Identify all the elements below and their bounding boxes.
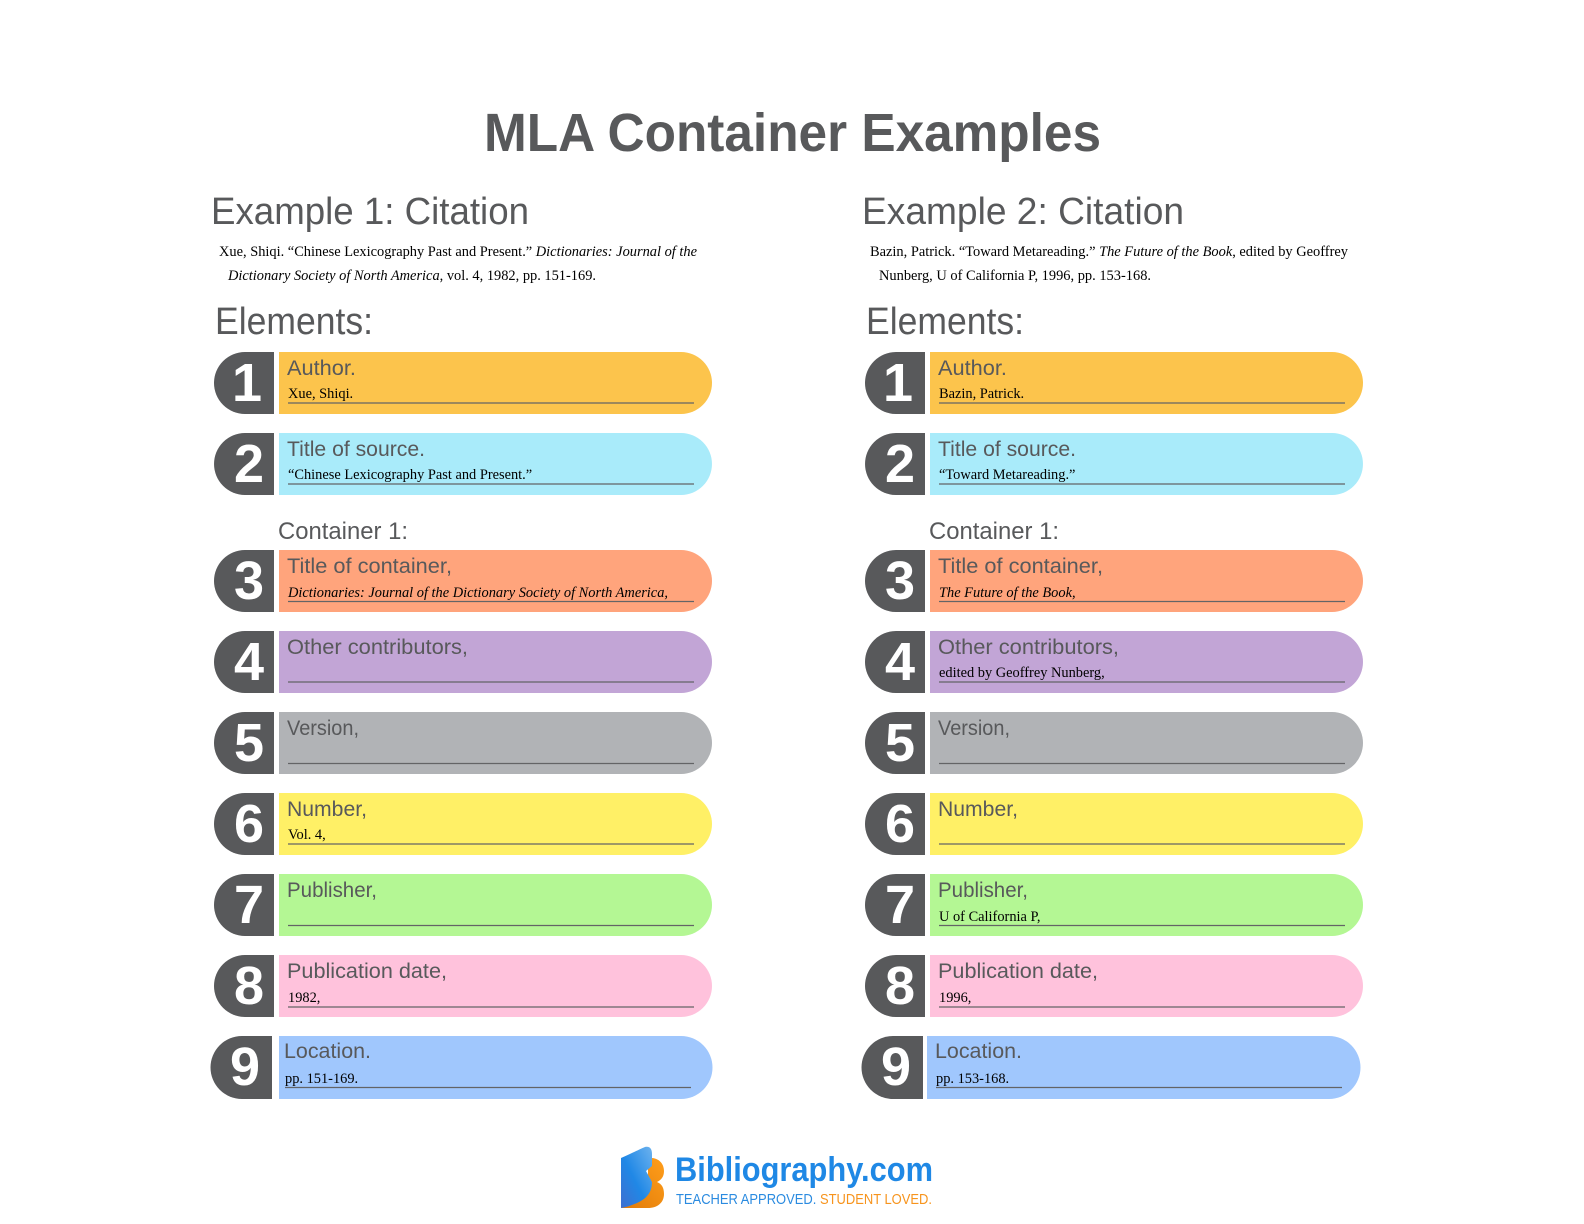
- row 8 publication date: Publication date,: [287, 960, 447, 983]
- heading: example 2 citation: Example 2: Citation: [862, 191, 1184, 233]
- row 3 title of container: Title of container,: [287, 555, 452, 578]
- container 1 label: Container 1:: [929, 518, 1059, 545]
- row 5 version: Version,: [287, 717, 359, 740]
- row 8 publication date: 8: [885, 956, 915, 1016]
- row 3 title of container: [865, 550, 1363, 612]
- row 4 other contributors: 4: [234, 632, 264, 692]
- row 3 title of container: 3: [234, 551, 264, 611]
- row 8 publication date: 1982,: [288, 990, 320, 1006]
- row 1 author: 1: [883, 353, 913, 413]
- row 5 version: Version,: [938, 717, 1010, 740]
- row 9 location: [862, 1036, 1360, 1099]
- row 8 publication date: [214, 955, 712, 1017]
- row 1 author: Xue, Shiqi.: [288, 386, 353, 402]
- row 7 publisher: [214, 874, 712, 936]
- row 8 publication date: 8: [234, 956, 264, 1016]
- citation text 2: Nunberg, U of California P, 1996, pp. 153-168.: [879, 268, 1151, 284]
- row 4 other contributors: edited by Geoffrey Nunberg,: [939, 665, 1105, 681]
- row 8 publication date: 1996,: [939, 990, 971, 1006]
- logo: Bibliography.com: [621, 1147, 933, 1208]
- row 6 number: Number,: [287, 798, 367, 821]
- row 9 location: 9: [230, 1037, 260, 1097]
- row 7 publisher: Publisher,: [938, 879, 1028, 902]
- row 2 title of source: Title of source.: [938, 438, 1076, 461]
- row 9 location: pp. 151-169.: [285, 1071, 358, 1087]
- row 7 publisher: U of California P,: [939, 909, 1041, 925]
- row 5 version: 5: [885, 713, 915, 773]
- row 4 other contributors: [214, 631, 712, 693]
- row 9 location: Location.: [935, 1040, 1022, 1063]
- citation text 1: [219, 244, 698, 284]
- row 5 version: [865, 712, 1363, 774]
- row 1 author: Author.: [938, 357, 1007, 380]
- row 5 version: 5: [234, 713, 264, 773]
- heading: elements: Elements:: [215, 301, 373, 343]
- row 4 other contributors: 4: [885, 632, 915, 692]
- row 6 number: [865, 793, 1363, 855]
- row 7 publisher: 7: [885, 875, 915, 935]
- row 3 title of container: Dictionaries: Journal of the Dictionary Society of North America,: [287, 585, 668, 601]
- row 6 number: 6: [885, 794, 915, 854]
- row 2 title of source: “Chinese Lexicography Past and Present.”: [288, 467, 532, 483]
- citation text 2: Bazin, Patrick. “Toward Metareading.” The Future of the Book, edited by Geoffrey: [870, 244, 1349, 260]
- citation text 1: Dictionary Society of North America, vol. 4, 1982, pp. 151-169.: [227, 268, 596, 284]
- row 8 publication date: [865, 955, 1363, 1017]
- row 7 publisher: [865, 874, 1363, 936]
- icon: book mark: [621, 1147, 664, 1208]
- row 2 title of source: 2: [234, 434, 264, 494]
- row 1 author: [865, 352, 1363, 414]
- row 5 version: [214, 712, 712, 774]
- row 7 publisher: 7: [234, 875, 264, 935]
- row 6 number: [214, 793, 712, 855]
- row 9 location: 9: [881, 1037, 911, 1097]
- row 4 other contributors: Other contributors,: [938, 636, 1119, 659]
- row 6 number: Vol. 4,: [288, 827, 326, 843]
- row 6 number: 6: [234, 794, 264, 854]
- row 1 author: 1: [232, 353, 262, 413]
- row 7 publisher: Publisher,: [287, 879, 377, 902]
- title: MLA Container Examples: [484, 103, 1101, 163]
- row 8 publication date: Publication date,: [938, 960, 1098, 983]
- row 1 author: Author.: [287, 357, 356, 380]
- row 4 other contributors: Other contributors,: [287, 636, 468, 659]
- row 2 title of source: 2: [885, 434, 915, 494]
- row 2 title of source: “Toward Metareading.”: [939, 467, 1075, 483]
- row 2 title of source: [865, 433, 1363, 495]
- citation text 2: [870, 244, 1349, 284]
- row 3 title of container: 3: [885, 551, 915, 611]
- row 3 title of container: The Future of the Book,: [939, 585, 1076, 601]
- row 3 title of container: Title of container,: [938, 555, 1103, 578]
- row 4 other contributors: [865, 631, 1363, 693]
- tagline: TEACHER APPROVED. STUDENT LOVED.: [676, 1192, 932, 1208]
- row 3 title of container: [214, 550, 712, 612]
- row 6 number: Number,: [938, 798, 1018, 821]
- heading: elements: Elements:: [866, 301, 1024, 343]
- row 9 location: pp. 153-168.: [936, 1071, 1009, 1087]
- panel: example 1: [211, 191, 713, 1099]
- wordmark: Bibliography.com: [675, 1151, 933, 1189]
- row 2 title of source: [214, 433, 712, 495]
- row 1 author: [214, 352, 712, 414]
- row 2 title of source: Title of source.: [287, 438, 425, 461]
- row 1 author: Bazin, Patrick.: [939, 386, 1024, 402]
- citation text 1: Xue, Shiqi. “Chinese Lexicography Past and Present.” Dictionaries: Journal of the: [219, 244, 698, 260]
- panel: example 2: [862, 191, 1363, 1099]
- row 9 location: [211, 1036, 713, 1099]
- row 9 location: Location.: [284, 1040, 371, 1063]
- container 1 label: Container 1:: [278, 518, 408, 545]
- heading: example 1 citation: Example 1: Citation: [211, 191, 529, 233]
